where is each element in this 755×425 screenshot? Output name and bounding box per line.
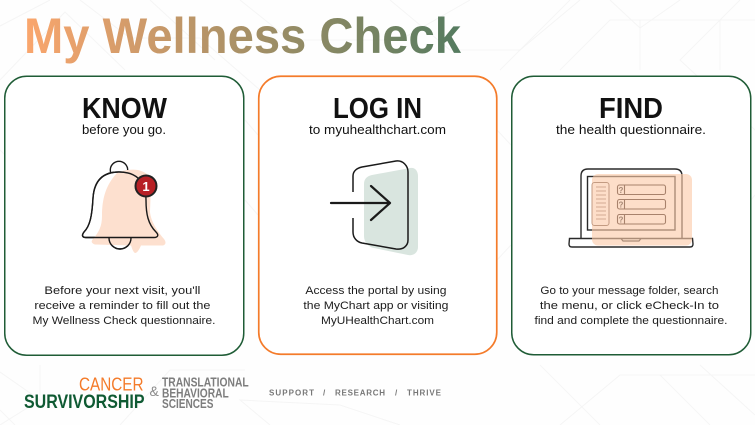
text: find body: Go to your message folder, search (540, 285, 718, 297)
form fields: ? (619, 216, 624, 224)
tagline: / (395, 388, 398, 398)
form fields: ? (619, 200, 624, 210)
text: log in body: Access the portal by using (305, 285, 446, 297)
icon: door with arrow (331, 161, 418, 255)
text: find body: the menu, or click eCheck-In to (540, 300, 719, 312)
logo: cancer: CANCER (79, 374, 144, 394)
tagline: / (323, 388, 326, 398)
logo: ampersand: & (150, 383, 160, 399)
icon: laptop with questionnaire (569, 169, 693, 247)
subheading: to myuhealthchart.com: to myuhealthchart.com (309, 123, 446, 137)
text: log in body: MyUHealthChart.com (321, 315, 434, 327)
icon: bell with notification (83, 161, 165, 253)
logo: survivorship: SURVIVORSHIP (24, 392, 145, 413)
tagline: RESEARCH (335, 388, 385, 398)
subheading: before you go: before you go. (82, 123, 166, 137)
heading: find: FIND (599, 93, 663, 125)
tagline: SUPPORT (269, 388, 314, 398)
form fields: ? (619, 186, 624, 195)
heading: know: KNOW (82, 93, 168, 125)
subheading: the health questionnaire: the health questionnaire. (556, 123, 706, 137)
logo: translational behavioral sciences: TRANSLATIONAL (162, 374, 249, 390)
text: know body: receive a reminder to fill out the (34, 300, 210, 312)
tagline (269, 388, 442, 398)
panel: know (5, 76, 244, 355)
text: find body: find and complete the questionnaire. (534, 315, 728, 327)
panel: log in (259, 76, 497, 354)
icon: bell with notification: 1 (142, 179, 150, 194)
heading: log in: LOG IN (333, 93, 422, 125)
form fields (618, 185, 666, 224)
panel: find (512, 76, 751, 355)
tagline: THRIVE (407, 388, 442, 398)
sidebar (592, 182, 609, 226)
logo: translational behavioral sciences: BEHAVIORAL (162, 386, 229, 400)
text: know body: My Wellness Check questionnaire. (32, 315, 216, 327)
title: My Wellness Check (24, 8, 461, 64)
logo: translational behavioral sciences: SCIENCES (162, 396, 214, 411)
footer logo (24, 374, 252, 413)
text: log in body: the MyChart app or visiting (303, 300, 448, 312)
text: know body: Before your next visit, you'll (44, 285, 200, 297)
